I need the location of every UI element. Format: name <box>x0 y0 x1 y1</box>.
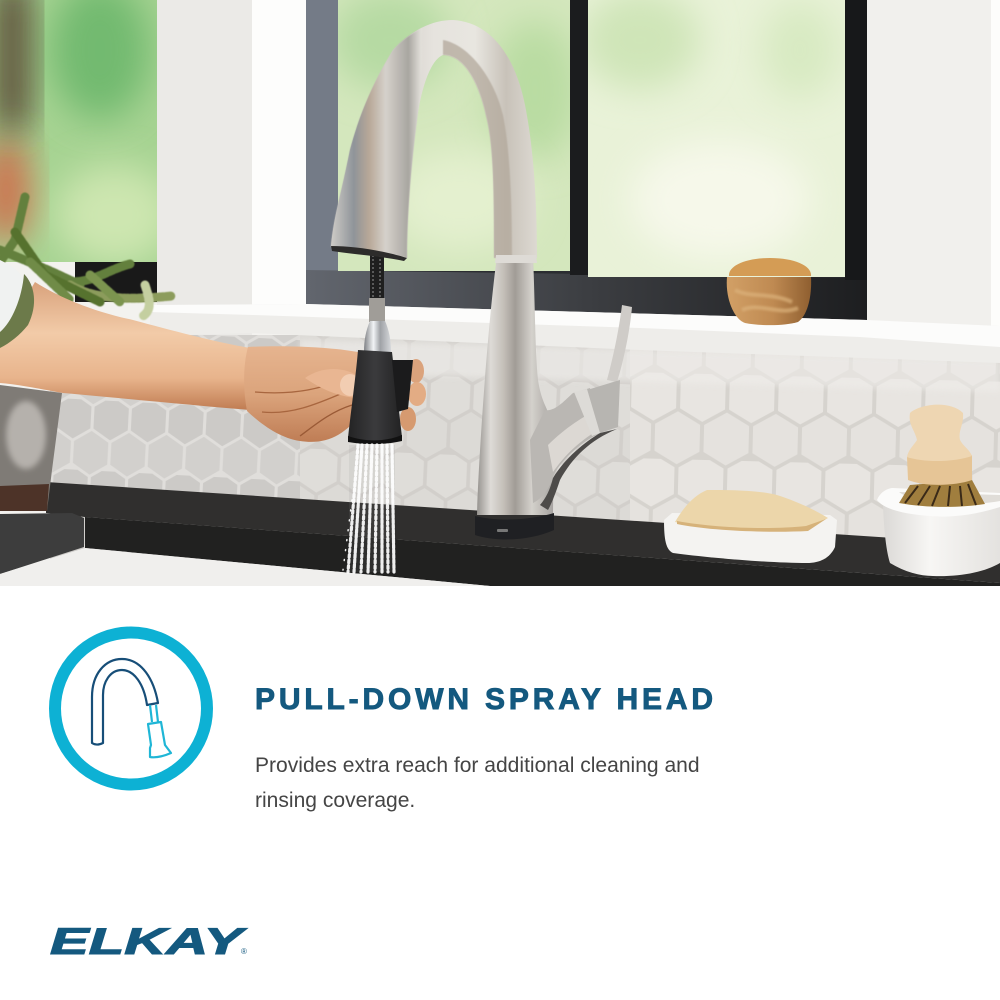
sleeve <box>0 260 34 348</box>
thumb <box>305 369 361 398</box>
right white wall <box>867 0 991 345</box>
heading: PULL-DOWN SPRAY HEAD <box>255 683 717 716</box>
left outdoor window view <box>0 0 157 262</box>
faucet body and base <box>475 255 632 539</box>
icon: faucet neck <box>92 659 158 744</box>
sink basin <box>0 548 490 586</box>
window glass right <box>580 0 845 277</box>
window sill <box>150 304 1000 363</box>
white cup <box>877 488 1000 576</box>
wooden container <box>727 258 811 325</box>
icon: spray head <box>148 705 171 757</box>
backsplash hexagon tiles <box>50 335 1000 560</box>
photo: kitchen faucet scene <box>0 0 1000 586</box>
water spray <box>343 445 394 572</box>
countertop <box>0 482 1000 586</box>
touch base <box>475 513 554 539</box>
plant pot <box>0 385 62 511</box>
pull-down spray head <box>348 250 413 444</box>
logo: Elkay: ® <box>241 947 247 956</box>
plant foliage <box>0 197 172 316</box>
lever handle <box>607 305 632 382</box>
forearm and hand <box>0 282 426 442</box>
white wall column <box>157 0 252 340</box>
window glass left <box>330 0 580 271</box>
soap sponge <box>675 490 828 532</box>
fingers behind head <box>408 359 424 383</box>
soap dish <box>664 513 837 563</box>
left window frame <box>75 262 158 302</box>
white wall <box>0 0 1000 586</box>
logo: Elkay: ELKAY <box>50 921 248 962</box>
main window frame <box>306 0 867 321</box>
description text: Provides extra reach for additional cleaning and <box>255 754 700 777</box>
description text <box>255 754 700 812</box>
description text: rinsing coverage. <box>255 789 415 812</box>
faucet spout <box>331 20 537 261</box>
brush <box>899 405 985 507</box>
